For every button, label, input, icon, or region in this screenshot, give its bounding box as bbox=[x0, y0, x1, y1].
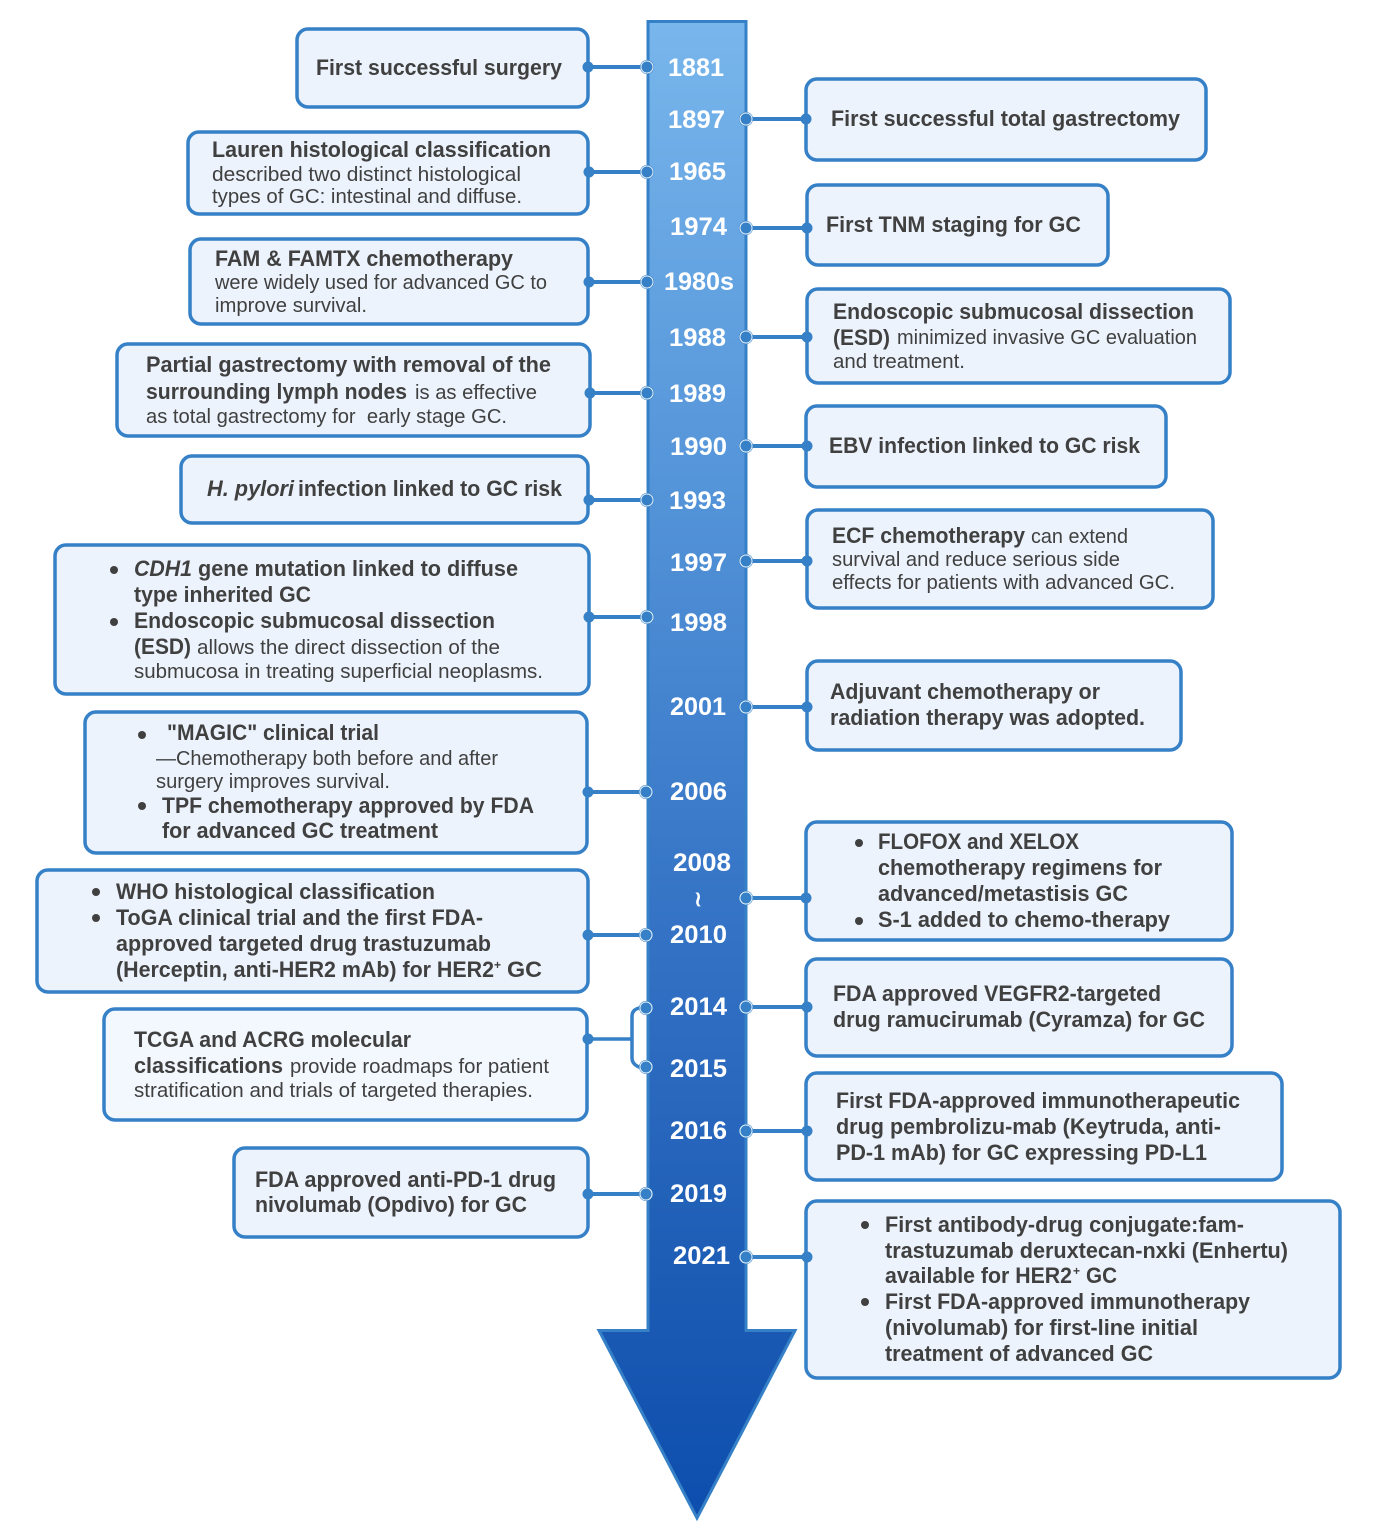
panel: Enhertu and nivolumab 2021: + bbox=[1073, 1264, 1080, 1278]
panel: WHO classification and ToGA 2010 bbox=[37, 870, 588, 992]
panel: TCGA and ACRG 2014-2015: provide roadmaps for patient bbox=[290, 1055, 549, 1078]
panel: pembrolizumab 2016: PD-1 mAb) for GC expressing PD-L1 bbox=[836, 1140, 1207, 1165]
panel: Enhertu and nivolumab 2021: available for HER2 bbox=[885, 1263, 1072, 1288]
panel: H. pylori 1993 bbox=[181, 456, 588, 523]
panel: FAM and FAMTX chemotherapy 1980s bbox=[190, 239, 588, 324]
panel: partial gastrectomy 1989: as total gastrectomy for early stage GC. bbox=[146, 405, 507, 428]
panel: CDH1 and ESD 1998: type inherited GC bbox=[134, 582, 311, 607]
panel: first successful total gastrectomy 1897 bbox=[806, 79, 1206, 160]
panel: first successful total gastrectomy 1897: First successful total gastrectomy bbox=[831, 106, 1180, 131]
connector: 1980s bbox=[584, 275, 654, 289]
panel: EBV infection 1990: EBV infection linked to GC risk bbox=[829, 433, 1140, 458]
year 1990: 1990 bbox=[670, 433, 727, 461]
connector: 1988 bbox=[739, 330, 812, 344]
year 1993: 1993 bbox=[669, 487, 726, 515]
panel: adjuvant chemotherapy 2001: Adjuvant chemotherapy or bbox=[830, 679, 1100, 704]
panel: CDH1 and ESD 1998 bbox=[55, 545, 589, 694]
year 1988: 1988 bbox=[669, 324, 726, 352]
panel: endoscopic submucosal dissection 1988: minimized invasive GC evaluation bbox=[897, 326, 1197, 349]
panel: H. pylori 1993: H. pylori bbox=[207, 476, 295, 501]
year 2016: 2016 bbox=[670, 1117, 727, 1145]
panel: ECF chemotherapy 1997: can extend bbox=[1031, 525, 1128, 548]
panel: first TNM staging 1974 bbox=[807, 185, 1108, 265]
year 1980s: 1980s bbox=[664, 268, 734, 296]
panel: Lauren histological classification 1965: Lauren histological classification bbox=[212, 137, 551, 162]
panel: Enhertu and nivolumab 2021: First FDA-approved immunotherapy bbox=[885, 1289, 1250, 1314]
panel: FLOFOX and XELOX 2008-2010: chemotherapy regimens for bbox=[878, 855, 1162, 880]
panel: CDH1 and ESD 1998: (ESD) bbox=[134, 634, 191, 659]
timeline arrow bbox=[599, 22, 795, 1518]
panel: MAGIC trial and TPF 2006: surgery improves survival. bbox=[156, 770, 390, 793]
connector: 1990 bbox=[739, 439, 812, 453]
panel: first TNM staging 1974: First TNM staging for GC bbox=[826, 212, 1081, 237]
panel: CDH1 and ESD 1998: Endoscopic submucosal dissection bbox=[134, 608, 495, 633]
panel: ECF chemotherapy 1997: effects for patients with advanced GC. bbox=[832, 571, 1175, 594]
panel: H. pylori 1993: infection linked to GC risk bbox=[298, 476, 562, 501]
panel: FLOFOX and XELOX 2008-2010: advanced/metastisis GC bbox=[878, 881, 1128, 906]
panel: pembrolizumab 2016: drug pembrolizu-mab (Keytruda, anti- bbox=[836, 1114, 1221, 1139]
panel: ECF chemotherapy 1997: ECF chemotherapy bbox=[832, 523, 1025, 548]
panel: first successful surgery 1881: First successful surgery bbox=[316, 55, 562, 80]
panel: nivolumab 2019: FDA approved anti-PD-1 drug bbox=[255, 1167, 556, 1192]
connector: 1993 bbox=[584, 493, 654, 507]
panel: partial gastrectomy 1989: Partial gastrectomy with removal of the bbox=[146, 352, 551, 377]
panel: MAGIC trial and TPF 2006: "MAGIC" clinical trial bbox=[167, 720, 379, 745]
connector: 1989 bbox=[584, 386, 654, 400]
panel: FLOFOX and XELOX 2008-2010: S-1 added to chemo-therapy bbox=[878, 907, 1170, 932]
panel: adjuvant chemotherapy 2001 bbox=[807, 661, 1181, 750]
panel: FAM and FAMTX chemotherapy 1980s: FAM & FAMTX chemotherapy bbox=[215, 246, 513, 271]
panel: CDH1 and ESD 1998: submucosa in treating superficial neoplasms. bbox=[134, 660, 543, 683]
panel: endoscopic submucosal dissection 1988 bbox=[807, 289, 1230, 383]
panel: ECF chemotherapy 1997 bbox=[807, 510, 1213, 608]
panel: endoscopic submucosal dissection 1988: Endoscopic submucosal dissection bbox=[833, 299, 1194, 324]
panel: EBV infection 1990 bbox=[806, 406, 1166, 487]
panel: pembrolizumab 2016: First FDA-approved immunotherapeutic bbox=[836, 1088, 1240, 1113]
panel: FLOFOX and XELOX 2008-2010 bbox=[806, 822, 1232, 940]
panel: Lauren histological classification 1965: types of GC: intestinal and diffuse. bbox=[212, 185, 522, 208]
panel: endoscopic submucosal dissection 1988: (ESD) bbox=[833, 325, 890, 350]
year 1897: 1897 bbox=[668, 106, 725, 134]
connector: 2001 bbox=[739, 700, 812, 714]
connector: 1881 bbox=[582, 60, 654, 74]
panel: WHO classification and ToGA 2010: + bbox=[494, 958, 501, 972]
connector: 1997 bbox=[739, 554, 812, 568]
year 1974: 1974 bbox=[670, 213, 727, 241]
connector: 2006 bbox=[582, 785, 653, 799]
panel: Enhertu and nivolumab 2021 bbox=[806, 1201, 1340, 1378]
panel: first successful surgery 1881 bbox=[297, 29, 588, 107]
panel: VEGFR2 ramucirumab 2014: drug ramucirumab (Cyramza) for GC bbox=[833, 1007, 1205, 1032]
year 2006: 2006 bbox=[670, 778, 727, 806]
panel: Enhertu and nivolumab 2021: trastuzumab deruxtecan-nxki (Enhertu) bbox=[885, 1238, 1288, 1263]
panel: MAGIC trial and TPF 2006 bbox=[85, 712, 587, 853]
panel: WHO classification and ToGA 2010: GC bbox=[507, 957, 542, 982]
connector: 1897 bbox=[739, 112, 812, 126]
year 2021: 2021 bbox=[673, 1242, 730, 1270]
connector: 2008-2010 bbox=[739, 891, 812, 905]
panel: TCGA and ACRG 2014-2015: classifications bbox=[134, 1053, 283, 1078]
connector: 1974 bbox=[739, 221, 812, 235]
year 1989: 1989 bbox=[669, 380, 726, 408]
panel: VEGFR2 ramucirumab 2014 bbox=[806, 959, 1232, 1056]
panel: WHO classification and ToGA 2010: approved targeted drug trastuzumab bbox=[116, 931, 491, 956]
connector: 1998 bbox=[584, 610, 654, 624]
panel: FAM and FAMTX chemotherapy 1980s: were widely used for advanced GC to bbox=[214, 271, 547, 294]
year 2019: 2019 bbox=[670, 1180, 727, 1208]
panel: TCGA and ACRG 2014-2015: TCGA and ACRG molecular bbox=[134, 1027, 411, 1052]
panel: VEGFR2 ramucirumab 2014: FDA approved VEGFR2-targeted bbox=[833, 981, 1161, 1006]
panel: pembrolizumab 2016 bbox=[806, 1073, 1282, 1180]
panel: partial gastrectomy 1989: is as effective bbox=[415, 381, 537, 404]
year 1998: 1998 bbox=[670, 609, 727, 637]
panel: TCGA and ACRG 2014-2015: stratification and trials of targeted therapies. bbox=[134, 1079, 533, 1102]
panel: partial gastrectomy 1989: surrounding lymph nodes bbox=[146, 379, 407, 404]
connector: 2021 bbox=[739, 1250, 812, 1264]
panel: WHO classification and ToGA 2010: ToGA clinical trial and the first FDA- bbox=[116, 905, 483, 930]
year 1965: 1965 bbox=[669, 158, 726, 186]
year 1881: 1881 bbox=[668, 54, 724, 82]
year range 2008 to 2010: 2010 bbox=[670, 921, 727, 949]
panel: ECF chemotherapy 1997: survival and reduce serious side bbox=[832, 548, 1120, 571]
connector: 2014 right bbox=[739, 1000, 812, 1014]
panel: nivolumab 2019 bbox=[234, 1148, 588, 1237]
year range 2008 to 2010: 2008 bbox=[673, 849, 731, 877]
connector: 2010 bbox=[582, 928, 653, 942]
panel: MAGIC trial and TPF 2006: for advanced GC treatment bbox=[162, 818, 438, 843]
panel: WHO classification and ToGA 2010: WHO histological classification bbox=[116, 879, 435, 904]
panel: partial gastrectomy 1989 bbox=[117, 344, 590, 436]
panel: CDH1 and ESD 1998: gene mutation linked to diffuse bbox=[198, 556, 518, 581]
year 2001: 2001 bbox=[670, 693, 726, 721]
bracket connector: 2014 and 2015 bbox=[582, 1001, 653, 1074]
connector: 2016 bbox=[739, 1124, 812, 1138]
year range 2008 to 2010 bbox=[670, 849, 731, 949]
connector: 2019 bbox=[582, 1187, 653, 1201]
panel: Enhertu and nivolumab 2021: GC bbox=[1086, 1263, 1117, 1288]
panel: FLOFOX and XELOX 2008-2010: FLOFOX and XELOX bbox=[878, 829, 1079, 854]
panel: Enhertu and nivolumab 2021: (nivolumab) for first-line initial bbox=[885, 1315, 1198, 1340]
panel: WHO classification and ToGA 2010: (Herceptin, anti-HER2 mAb) for HER2 bbox=[116, 957, 494, 982]
panel: FAM and FAMTX chemotherapy 1980s: improve survival. bbox=[215, 294, 367, 317]
year 2015: 2015 bbox=[670, 1055, 727, 1083]
panel: Lauren histological classification 1965: described two distinct histological bbox=[212, 163, 521, 186]
connector: 1965 bbox=[584, 165, 654, 179]
panel: MAGIC trial and TPF 2006: —Chemotherapy both before and after bbox=[156, 747, 498, 770]
panel: CDH1 and ESD 1998: allows the direct dissection of the bbox=[197, 636, 500, 659]
year range 2008 to 2010: ≀ bbox=[694, 888, 702, 911]
year 2014: 2014 bbox=[670, 993, 727, 1021]
panel: Lauren histological classification 1965 bbox=[188, 132, 588, 214]
panel: MAGIC trial and TPF 2006: TPF chemotherapy approved by FDA bbox=[162, 793, 534, 818]
panel: nivolumab 2019: nivolumab (Opdivo) for GC bbox=[255, 1192, 527, 1217]
panel: Enhertu and nivolumab 2021: treatment of advanced GC bbox=[885, 1341, 1153, 1366]
panel: TCGA and ACRG 2014-2015 bbox=[104, 1009, 587, 1120]
panel: endoscopic submucosal dissection 1988: and treatment. bbox=[833, 350, 965, 373]
panel: Enhertu and nivolumab 2021: First antibody-drug conjugate:fam- bbox=[885, 1212, 1244, 1237]
panel: CDH1 and ESD 1998: CDH1 bbox=[134, 556, 192, 581]
panel: adjuvant chemotherapy 2001: radiation therapy was adopted. bbox=[830, 705, 1145, 730]
year 1997: 1997 bbox=[670, 549, 727, 577]
